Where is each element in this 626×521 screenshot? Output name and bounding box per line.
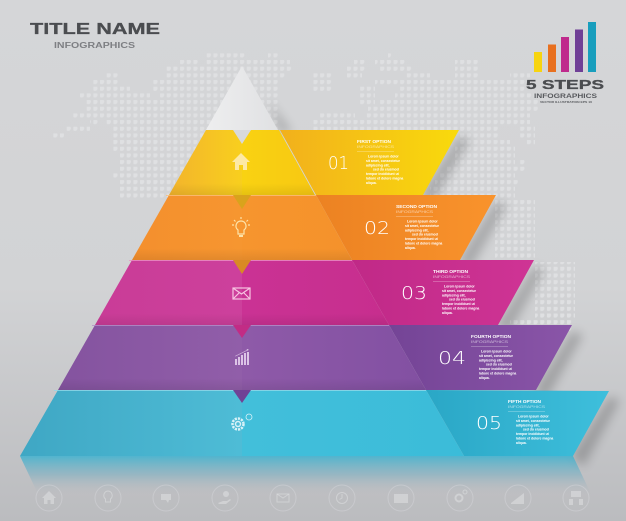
step 1 text: tempor incididunt ut	[366, 172, 400, 176]
step 2 text: SECOND OPTION	[396, 204, 437, 209]
step 3 text	[401, 269, 479, 315]
step 1 text: adipiscing elit,	[366, 163, 390, 167]
step 4 text: FOURTH OPTION	[471, 334, 511, 339]
step 4 text: 04	[438, 348, 466, 369]
step 2 text	[364, 204, 442, 250]
step 3 text: sit amet, consectetur	[442, 289, 477, 293]
step 5 text: adipiscing elit,	[516, 423, 540, 427]
step 5 text: 05	[476, 413, 502, 434]
title	[30, 21, 160, 50]
step 4 text: INFOGRAPHICS	[471, 340, 509, 344]
logo: 5 steps: VECTOR ILLUSTRATION EPS 10	[540, 100, 593, 104]
step 1 text: INFOGRAPHICS	[357, 145, 395, 149]
shadows behind right panels	[268, 100, 620, 466]
step 5: blue layer	[20, 390, 609, 456]
notch	[233, 325, 251, 338]
step 3 text: THIRD OPTION	[433, 269, 468, 274]
icon row	[36, 485, 589, 511]
step 4 text: sed do eiusmod	[486, 363, 512, 367]
icon: gears	[232, 414, 252, 430]
step 4 text: tempor incididunt ut	[479, 367, 513, 371]
step 4: purple layer	[58, 325, 572, 390]
notch	[233, 260, 251, 274]
step 5 text: Lorem ipsum dolor	[518, 414, 549, 418]
step 1 text: sed do eiusmod	[373, 168, 399, 172]
step 3 text: tempor incididunt ut	[442, 302, 476, 306]
step 1: yellow layer	[169, 130, 459, 195]
logo: 5 steps: 5 STEPS	[526, 77, 604, 92]
step 4 text	[438, 334, 516, 380]
notch	[233, 195, 251, 209]
step 2: orange layer	[132, 195, 496, 260]
step 3 text: aliqua.	[442, 311, 453, 315]
step 5 text: sit amet, consectetur	[516, 419, 551, 423]
step 4 text: Lorem ipsum dolor	[481, 350, 512, 354]
step 1 text: aliqua.	[366, 181, 377, 185]
step 5 text	[476, 399, 553, 445]
step 3 text: Lorem ipsum dolor	[444, 284, 475, 288]
step 3 text: INFOGRAPHICS	[433, 275, 471, 279]
step 2 text: sed do eiusmod	[412, 233, 438, 237]
step 5 text: aliqua.	[516, 441, 527, 445]
step 1 text	[328, 139, 403, 185]
logo: 5 steps	[526, 22, 604, 104]
step 2 text: sit amet, consectetur	[405, 224, 440, 228]
step 3: pink layer	[95, 260, 534, 325]
top grey triangle	[206, 66, 278, 130]
icon: envelope	[233, 288, 250, 299]
icon: home	[232, 153, 250, 170]
icon: growth chart	[235, 349, 249, 365]
step 4 text: labore et dolore magna	[479, 372, 516, 376]
step 5 text: tempor incididunt ut	[516, 432, 550, 436]
step 1 text: sit amet, consectetur	[366, 159, 401, 163]
notch	[233, 130, 251, 144]
step 2 text: tempor incididunt ut	[405, 237, 439, 241]
step 2 text: adipiscing elit,	[405, 228, 429, 232]
step 2 text: INFOGRAPHICS	[396, 210, 434, 214]
step 2 text: aliqua.	[405, 246, 416, 250]
step 3 text: 03	[401, 283, 427, 304]
step 1 text: 01	[328, 153, 349, 174]
dotted world map	[52, 52, 575, 332]
step 5 text: labore et dolore magna	[516, 436, 553, 440]
title: TITLE NAME	[30, 21, 160, 38]
icon: light bulb	[232, 217, 250, 236]
step 4 text: adipiscing elit,	[479, 358, 503, 362]
step 3 text: adipiscing elit,	[442, 293, 466, 297]
step 2 text: 02	[364, 218, 390, 239]
step 3 text: sed do eiusmod	[449, 298, 475, 302]
bottom reflection	[20, 456, 591, 494]
step 3 text: labore et dolore magna	[442, 306, 479, 310]
notch	[233, 390, 251, 403]
step 4 text: sit amet, consectetur	[479, 354, 514, 358]
step 1 text: Lorem ipsum dolor	[368, 154, 399, 158]
step 2 text: labore et dolore magna	[405, 242, 442, 246]
step 5 text: sed do eiusmod	[523, 428, 549, 432]
step 1 text: labore et dolore magna	[366, 176, 403, 180]
bar chart	[534, 22, 596, 72]
step 5 text: FIFTH OPTION	[508, 399, 541, 404]
logo: 5 steps: INFOGRAPHICS	[534, 93, 598, 100]
step 4 text: aliqua.	[479, 376, 490, 380]
step 5 text: INFOGRAPHICS	[508, 405, 546, 409]
step 2 text: Lorem ipsum dolor	[407, 220, 438, 224]
step 1 text: FIRST OPTION	[357, 139, 391, 144]
title: INFOGRAPHICS	[54, 41, 136, 50]
